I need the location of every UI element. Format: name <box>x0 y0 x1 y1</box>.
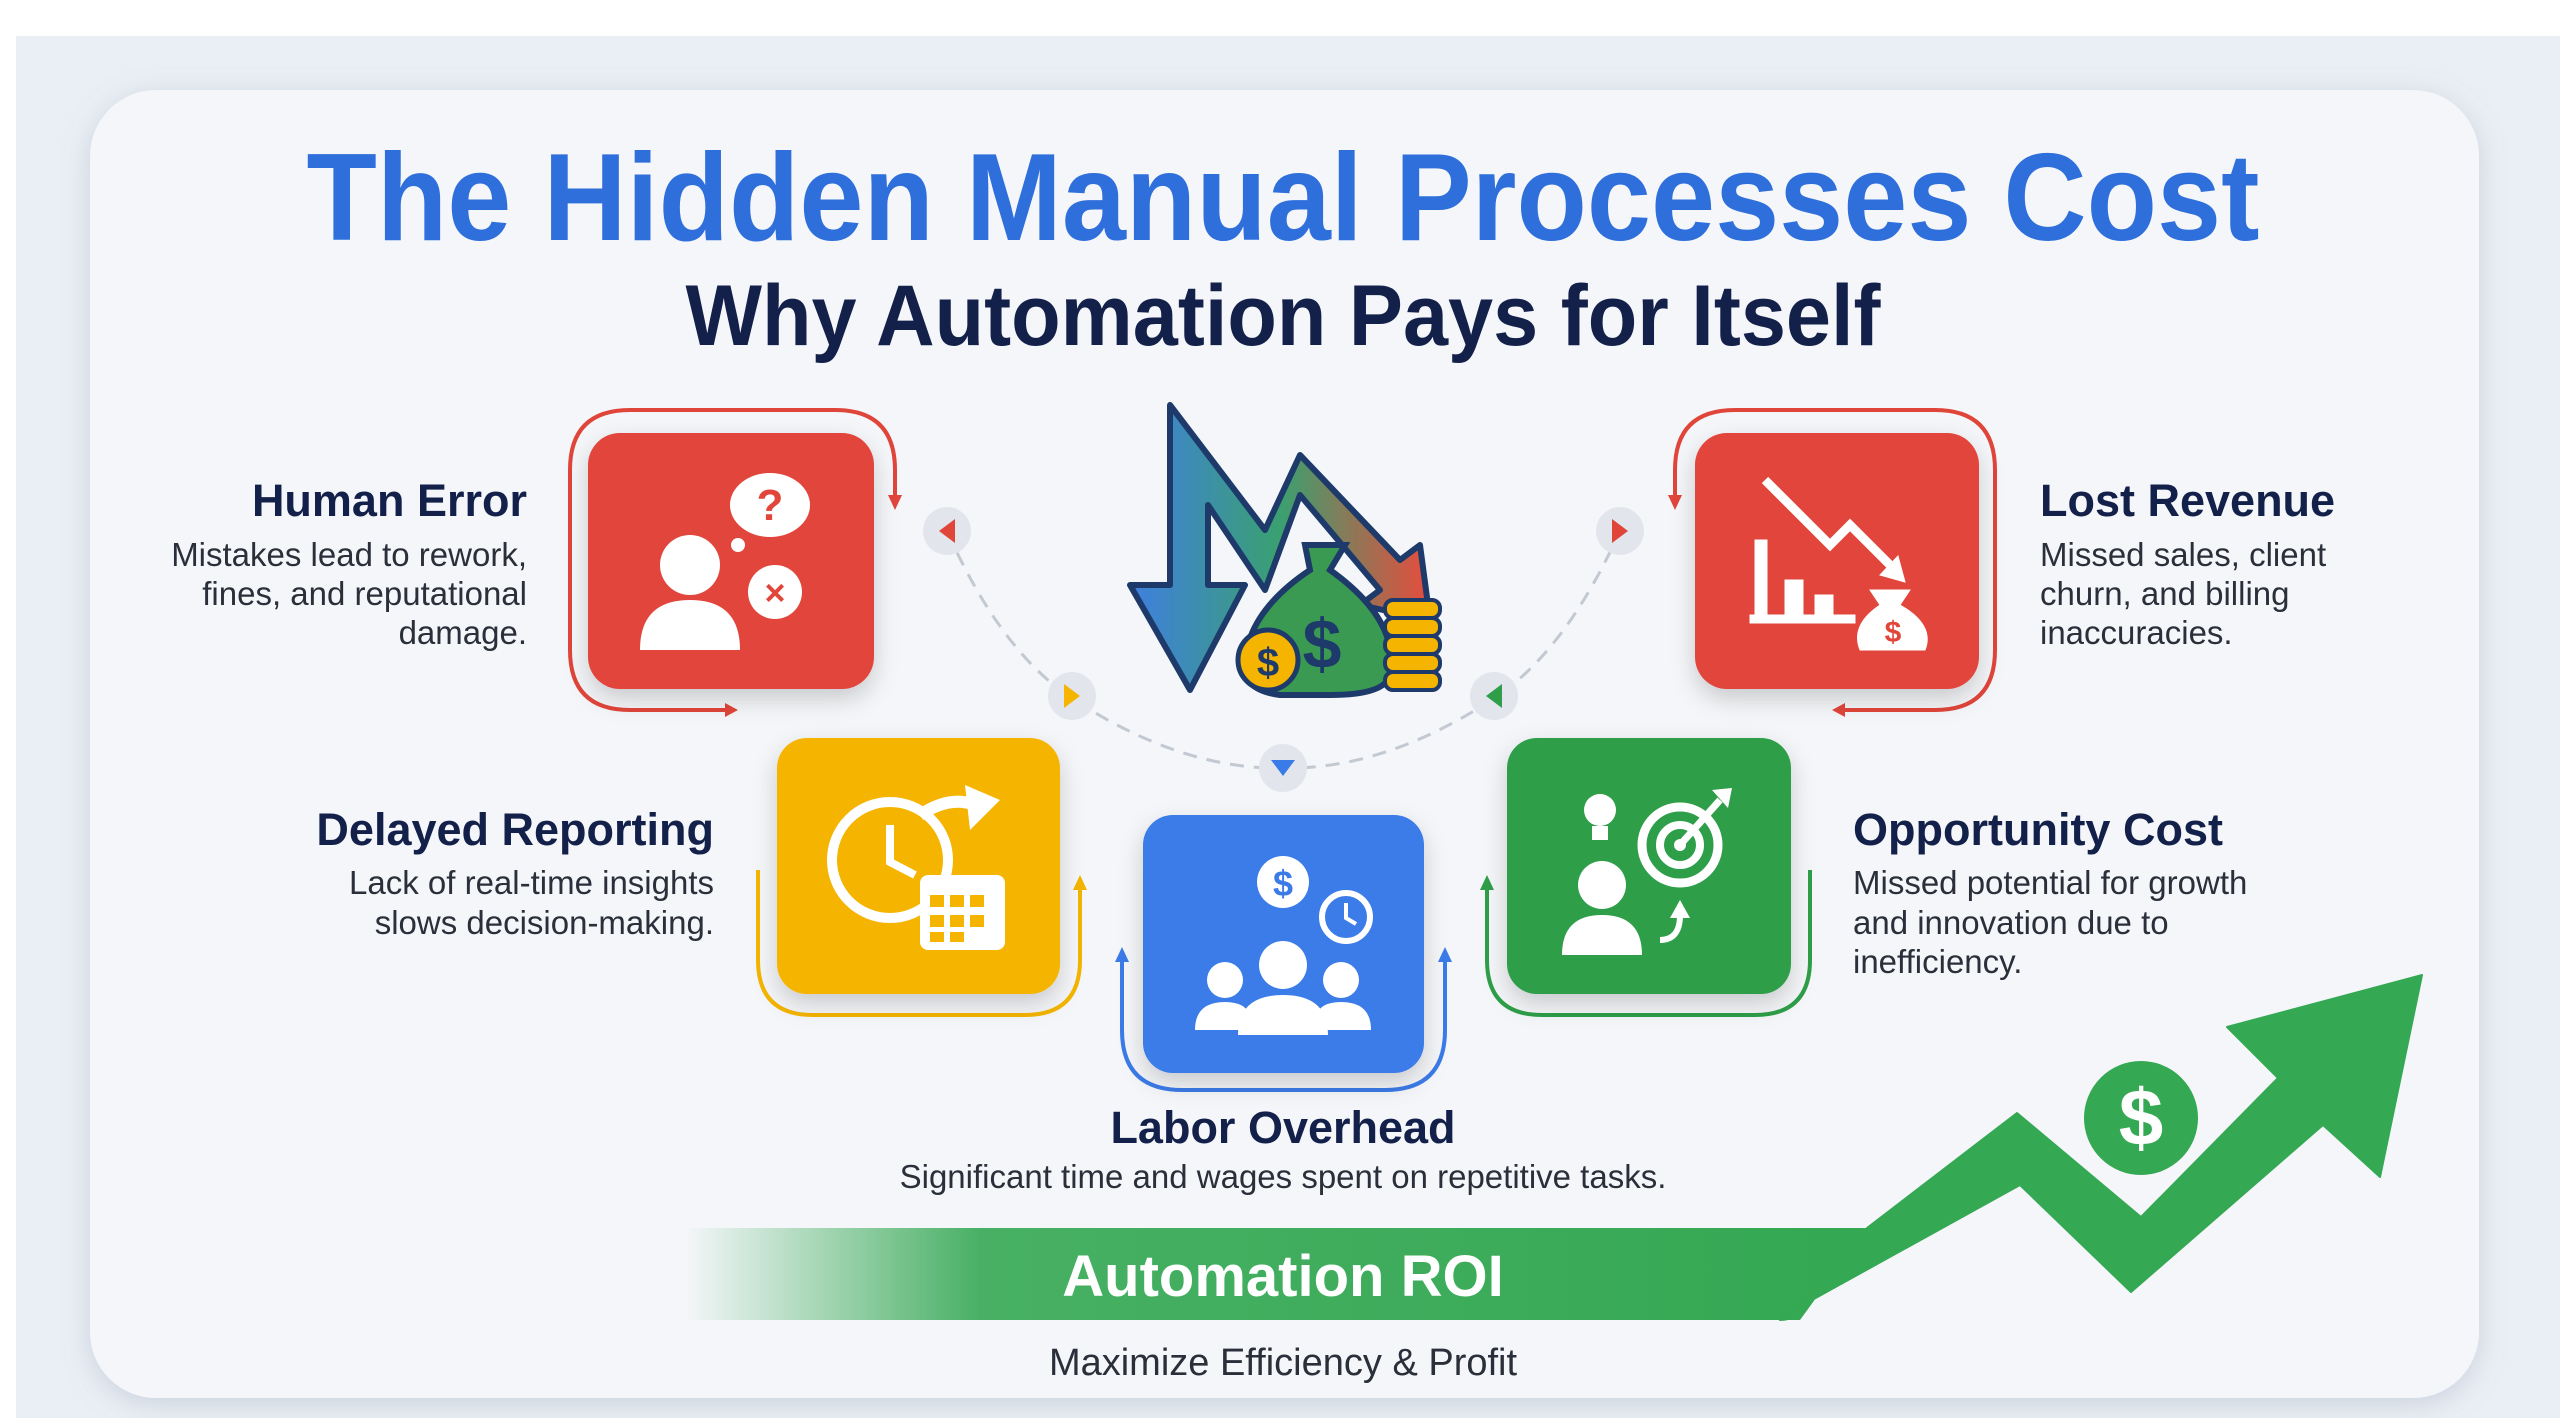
title: The Hidden Manual Processes Cost <box>306 129 2260 267</box>
text: labor overhead <box>900 1102 1666 1195</box>
center icon: falling arrow and money bag <box>1130 405 1440 695</box>
panel: human error: ? <box>757 481 783 530</box>
text: human error: Human Error <box>252 475 527 526</box>
icon: growth target <box>1562 788 1732 955</box>
icon: dollar circle <box>2081 1058 2201 1178</box>
panel: human error: × <box>764 572 786 613</box>
icon: dollar circle: $ <box>2119 1073 2163 1162</box>
panel: human error <box>570 410 902 717</box>
text: labor overhead: Labor Overhead <box>1110 1102 1456 1153</box>
text: human error <box>171 475 527 651</box>
text: lost revenue: churn, and billing <box>2040 575 2290 612</box>
text: opportunity cost: inefficiency. <box>1853 943 2022 980</box>
ROI label: Automation ROI <box>1062 1244 1504 1309</box>
text: human error: damage. <box>399 614 527 651</box>
panel: lost revenue: $ <box>1885 616 1902 649</box>
center icon: falling arrow and money bag: $ <box>1303 605 1341 683</box>
text: lost revenue <box>2040 475 2335 651</box>
panel: labor overhead <box>1115 815 1452 1090</box>
icon: falling chart <box>1750 480 1927 650</box>
subtitle: Why Automation Pays for Itself <box>686 268 1881 364</box>
text: opportunity cost: and innovation due to <box>1853 904 2169 941</box>
icon: team with money and clock <box>1195 856 1371 1035</box>
panel: lost revenue <box>1668 410 1995 717</box>
text: human error: fines, and reputational <box>202 575 527 612</box>
text: lost revenue: Missed sales, client <box>2040 536 2326 573</box>
panel: labor overhead: $ <box>1273 863 1293 904</box>
ROI band with rising arrow <box>686 975 2422 1320</box>
text: labor overhead: Significant time and wages spent on repetitive tasks. <box>900 1158 1666 1195</box>
text: delayed reporting: Delayed Reporting <box>316 804 714 855</box>
dashed connector arc <box>923 507 1644 792</box>
text: opportunity cost: Missed potential for growth <box>1853 864 2247 901</box>
text: lost revenue: Lost Revenue <box>2040 475 2335 526</box>
tagline: Maximize Efficiency & Profit <box>1049 1342 1517 1384</box>
text: opportunity cost: Opportunity Cost <box>1853 804 2223 855</box>
text: opportunity cost <box>1853 804 2247 980</box>
panel: opportunity cost <box>1480 738 1810 1015</box>
text: delayed reporting: Lack of real-time insights <box>349 864 714 901</box>
icon: confused person <box>640 473 810 650</box>
center icon: falling arrow and money bag: $ <box>1257 641 1279 685</box>
text: delayed reporting <box>316 804 714 941</box>
text: human error: Mistakes lead to rework, <box>171 536 527 573</box>
panel: delayed reporting <box>758 738 1087 1015</box>
text: delayed reporting: slows decision-making. <box>375 904 714 941</box>
icon: clock and calendar <box>832 785 1005 950</box>
text: lost revenue: inaccuracies. <box>2040 614 2233 651</box>
